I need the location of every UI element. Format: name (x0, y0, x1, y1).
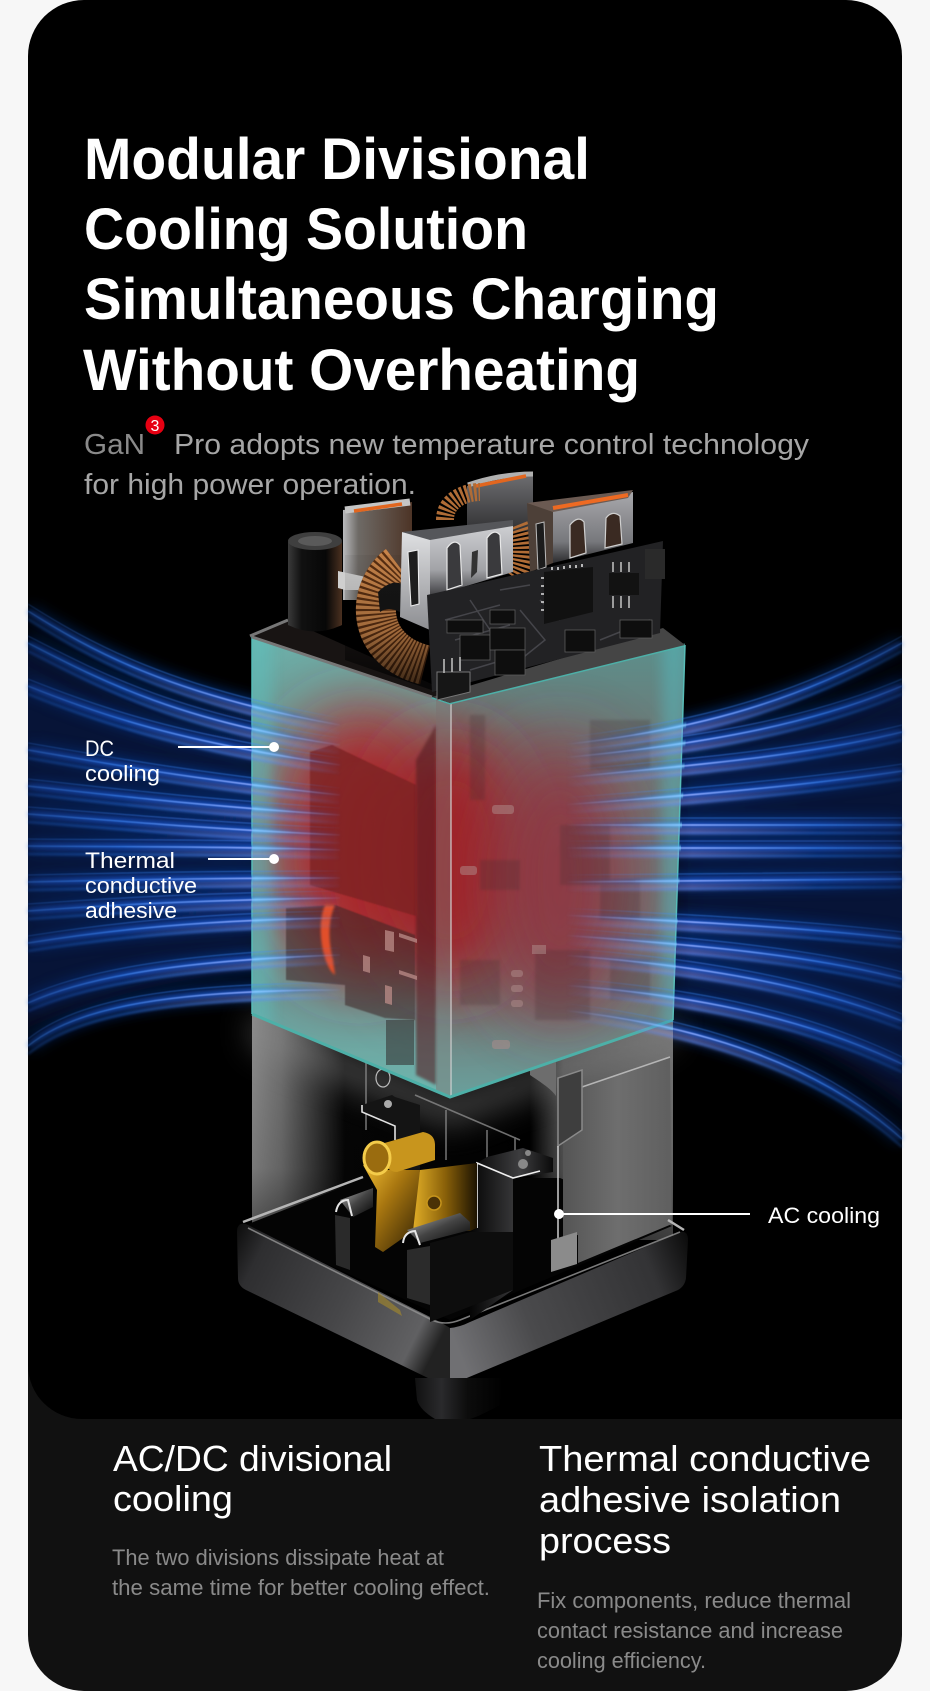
tray rear rim (243, 1177, 684, 1230)
panel: lower caption area (28, 1340, 902, 1691)
tray inner rim highlight (248, 1228, 680, 1323)
heading (539, 1438, 871, 1561)
port front (553, 492, 633, 563)
lower housing (AC section) (252, 1000, 673, 1240)
edge glow left (246, 630, 272, 1030)
callout: thermal conductive adhesive (85, 848, 279, 923)
AC side insulation sheet (563, 1057, 672, 1263)
heading: Thermal conductive (539, 1438, 871, 1479)
title: Cooling Solution (84, 197, 528, 262)
callout dot (269, 854, 279, 864)
components (447, 610, 652, 675)
tray left wall (237, 1224, 450, 1384)
rear copper coil (445, 492, 480, 520)
edge glow right (662, 630, 686, 1030)
right streaks (560, 636, 902, 1147)
description (537, 1588, 851, 1673)
panel: black hero area (28, 0, 902, 1419)
board edge strip (416, 725, 436, 1085)
callout line (559, 1213, 750, 1215)
header pins (437, 672, 470, 700)
heat glow and internals (246, 630, 686, 1100)
front USB-A port (400, 520, 513, 630)
right face circuitry (460, 715, 650, 1020)
heading: process (539, 1520, 671, 1561)
airflow streaks over block (28, 604, 902, 1147)
chip (544, 567, 593, 624)
pcb traces (445, 585, 650, 670)
top glow of lower housing (252, 1014, 673, 1125)
heading (113, 1438, 392, 1519)
callout dot (269, 742, 279, 752)
heat sink plate (310, 745, 416, 916)
callout dot (554, 1209, 564, 1219)
red heat right (485, 740, 635, 1020)
top plate (252, 620, 450, 703)
text block: thermal conductive adhesive isolation process (537, 1438, 871, 1673)
left streak highlights near block (136, 668, 336, 1009)
main copper coil (345, 555, 440, 693)
cord (415, 1378, 503, 1419)
title: Simultaneous Charging (84, 267, 719, 332)
cyan glass-edge crossings (252, 704, 686, 1030)
port left wall (400, 532, 430, 630)
port front (430, 525, 513, 597)
subtitle (84, 416, 810, 501)
heading: cooling (113, 1478, 233, 1519)
internal frame lines (366, 1060, 520, 1170)
left haze (28, 630, 252, 1042)
tray interior (243, 1178, 672, 1320)
description: The two divisions dissipate heat at (112, 1545, 444, 1570)
rear USB-C port (467, 473, 533, 540)
red heat left (270, 705, 450, 985)
PCB board (427, 541, 665, 700)
subtitle: GaN (84, 429, 145, 461)
glass edges (252, 637, 685, 1097)
heading: AC/DC divisional (113, 1438, 392, 1479)
left streaks (28, 604, 340, 1054)
lower pcb on left face (286, 905, 415, 1020)
callout: AC cooling (554, 1203, 880, 1228)
description: Fix components, reduce thermal (537, 1588, 851, 1613)
glass left face (252, 637, 450, 1097)
description: the same time for better cooling effect. (112, 1575, 490, 1600)
glass right face (450, 645, 685, 1097)
callout line (208, 858, 274, 860)
callout: DC cooling (85, 736, 279, 786)
heading: adhesive isolation (539, 1479, 841, 1520)
subtitle: Pro adopts new temperature control technology (174, 429, 810, 461)
callout text: Thermal (85, 848, 175, 873)
front cylinder clip (407, 1213, 470, 1243)
callout text (85, 736, 160, 786)
red heat centre (370, 730, 530, 990)
gold curl (367, 1132, 435, 1172)
rear bracket (362, 1095, 420, 1190)
icon: red badge 3 (146, 416, 164, 435)
port left wall (527, 503, 553, 572)
rear USB-A port (527, 490, 633, 572)
callout text: AC cooling (768, 1203, 880, 1228)
icon: red badge 3: 3 (151, 418, 160, 435)
tray right wall (450, 1232, 688, 1384)
gold terminal body (413, 1163, 477, 1231)
callout text: adhesive (85, 898, 177, 923)
callout text: DC (85, 736, 114, 761)
description (112, 1545, 490, 1600)
right haze (674, 666, 902, 1121)
capacitor (288, 532, 342, 632)
callout text: cooling (85, 761, 160, 786)
airflow streaks glow behind block (0, 611, 930, 1140)
callout line (178, 746, 274, 748)
small chip with legs (609, 573, 639, 595)
plug metal parts (335, 1095, 553, 1322)
text block: AC/DC divisional cooling (112, 1438, 490, 1600)
title (83, 127, 719, 403)
title: Without Overheating (83, 338, 640, 403)
callout text: conductive (85, 873, 197, 898)
rear cylinder clip (340, 1188, 373, 1217)
callout text (85, 848, 197, 923)
description: cooling efficiency. (537, 1648, 706, 1673)
description: contact resistance and increase (537, 1618, 843, 1643)
left USB-C port (338, 502, 412, 600)
subtitle: for high power operation. (84, 469, 416, 501)
right folded bracket (470, 1148, 553, 1320)
top assembly: ports, coils and PCB (250, 473, 685, 703)
corner pillar (436, 700, 451, 1100)
glass thermal block (246, 630, 686, 1100)
title: Modular Divisional (84, 127, 590, 192)
base tray (237, 1057, 688, 1419)
right streak highlights near block (580, 689, 806, 1078)
gold strap (363, 1165, 420, 1252)
